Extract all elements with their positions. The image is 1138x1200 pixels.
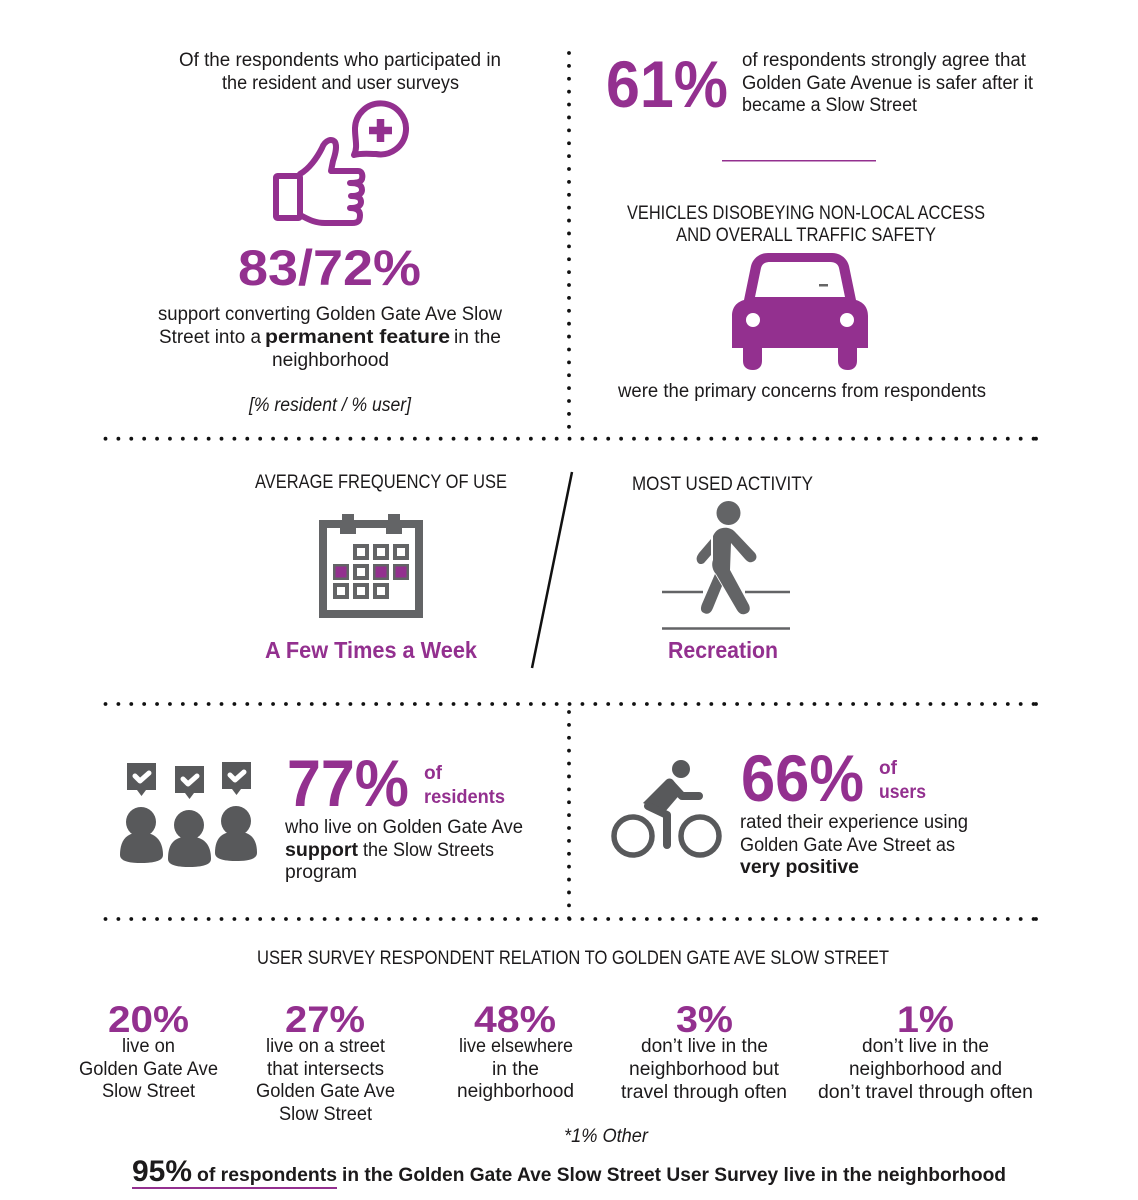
support text: in the [454,327,501,348]
column: 20%: 20% [108,999,189,1040]
column: 1%: don’t travel through often [818,1082,1033,1103]
support text: Street into a [159,327,261,348]
panel: user survey respondent relation [79,948,1033,1147]
icon: calendar [323,514,419,614]
footer: 95% live in the neighborhood: of respondents [197,1165,337,1186]
label: of residents: of [424,763,443,784]
support text: support converting Golden Gate Ave Slow [158,304,502,325]
concerns heading: VEHICLES DISOBEYING NON-LOCAL ACCESS [627,203,985,224]
column: 1%: 1% [897,999,954,1040]
column: 48% [457,999,574,1102]
label: of residents: residents [424,787,505,808]
column: 1% [818,999,1033,1103]
column: 27%: Golden Gate Ave [256,1081,395,1102]
heading: respondent relation: USER SURVEY RESPONDENT RELATION TO GOLDEN GATE AVE SLOW STREET [257,948,889,969]
column: 3% [621,999,787,1103]
column: 27%: Slow Street [279,1104,373,1125]
icon: cyclist [614,760,719,855]
column: 27%: live on a street [266,1036,386,1057]
value: recreation: Recreation [668,637,778,663]
column: 27% [256,999,395,1125]
statistic: 77%: 77% [287,746,409,820]
support text [158,304,502,371]
residents text: the Slow Streets [363,840,494,861]
note: 1% other: *1% Other [564,1126,649,1147]
residents text: support [285,840,359,861]
note: resident / user: [% resident / % user] [248,395,412,416]
panel: most used activity [632,474,813,663]
panel: residents support [120,746,523,883]
support text: neighborhood [272,350,389,371]
column: 27%: that intersects [267,1059,384,1080]
intro text: Of the respondents who participated in [179,50,501,71]
column: 1%: neighborhood and [849,1059,1002,1080]
footer: 95% live in the neighborhood: 95% [132,1155,192,1188]
column: 3%: don’t live in the [641,1036,768,1057]
intro text: the resident and user surveys [222,73,459,94]
heading: most used activity: MOST USED ACTIVITY [632,474,813,495]
footer: 95% live in the neighborhood [132,1155,1006,1189]
concerns heading: AND OVERALL TRAFFIC SAFETY [676,225,936,246]
column: 1%: don’t live in the [862,1036,989,1057]
support text: permanent feature [265,327,450,348]
panel: users experience [614,741,968,878]
panel: safety [606,47,1034,402]
icon: thumbs up with plus speech bubble [276,103,406,223]
column: 27%: 27% [285,999,365,1040]
users text: very positive [740,857,859,878]
column: 20% [79,999,218,1102]
icon: pedestrian [662,501,790,628]
statistic: 83/72%: 83/72% [238,240,421,296]
column: 3%: travel through often [621,1082,787,1103]
concerns text: were the primary concerns from respondents [617,381,986,402]
panel: permanent feature support [158,50,502,416]
icon: car [732,253,868,370]
label: of users: of [879,758,898,779]
intro text [179,50,501,94]
column: 48%: neighborhood [457,1081,574,1102]
residents text: program [285,862,357,883]
panel: frequency of use [255,472,507,663]
safety text [742,50,1034,116]
statistic: 61%: 61% [606,47,728,121]
safety text: of respondents strongly agree that [742,50,1027,71]
column: 20%: live on [122,1036,175,1057]
safety text: Golden Gate Avenue is safer after it [742,73,1034,94]
column: 20%: Slow Street [102,1081,196,1102]
footer: 95% live in the neighborhood: in the Golden Gate Ave Slow Street User Survey live in the neighborhood [342,1165,1006,1186]
heading: average frequency: AVERAGE FREQUENCY OF USE [255,472,507,493]
users text: rated their experience using [740,812,968,833]
residents text: who live on Golden Gate Ave [284,817,523,838]
statistic: 66%: 66% [741,741,864,815]
column: 3%: neighborhood but [629,1059,780,1080]
icon: three residents with check bubbles [120,762,257,867]
value: a few times a week: A Few Times a Week [265,637,477,663]
column: 48%: live elsewhere [459,1036,573,1057]
label: of users [879,758,926,803]
concerns heading [627,203,985,246]
column: 20%: Golden Gate Ave [79,1059,218,1080]
label: of users: users [879,782,926,803]
users text [740,812,968,878]
residents text [284,817,523,883]
column: 3%: 3% [676,999,733,1040]
label: of residents [424,763,505,808]
column: 48%: in the [492,1059,539,1080]
safety text: became a Slow Street [742,95,918,116]
users text: Golden Gate Ave Street as [740,835,955,856]
column: 48%: 48% [474,999,556,1040]
